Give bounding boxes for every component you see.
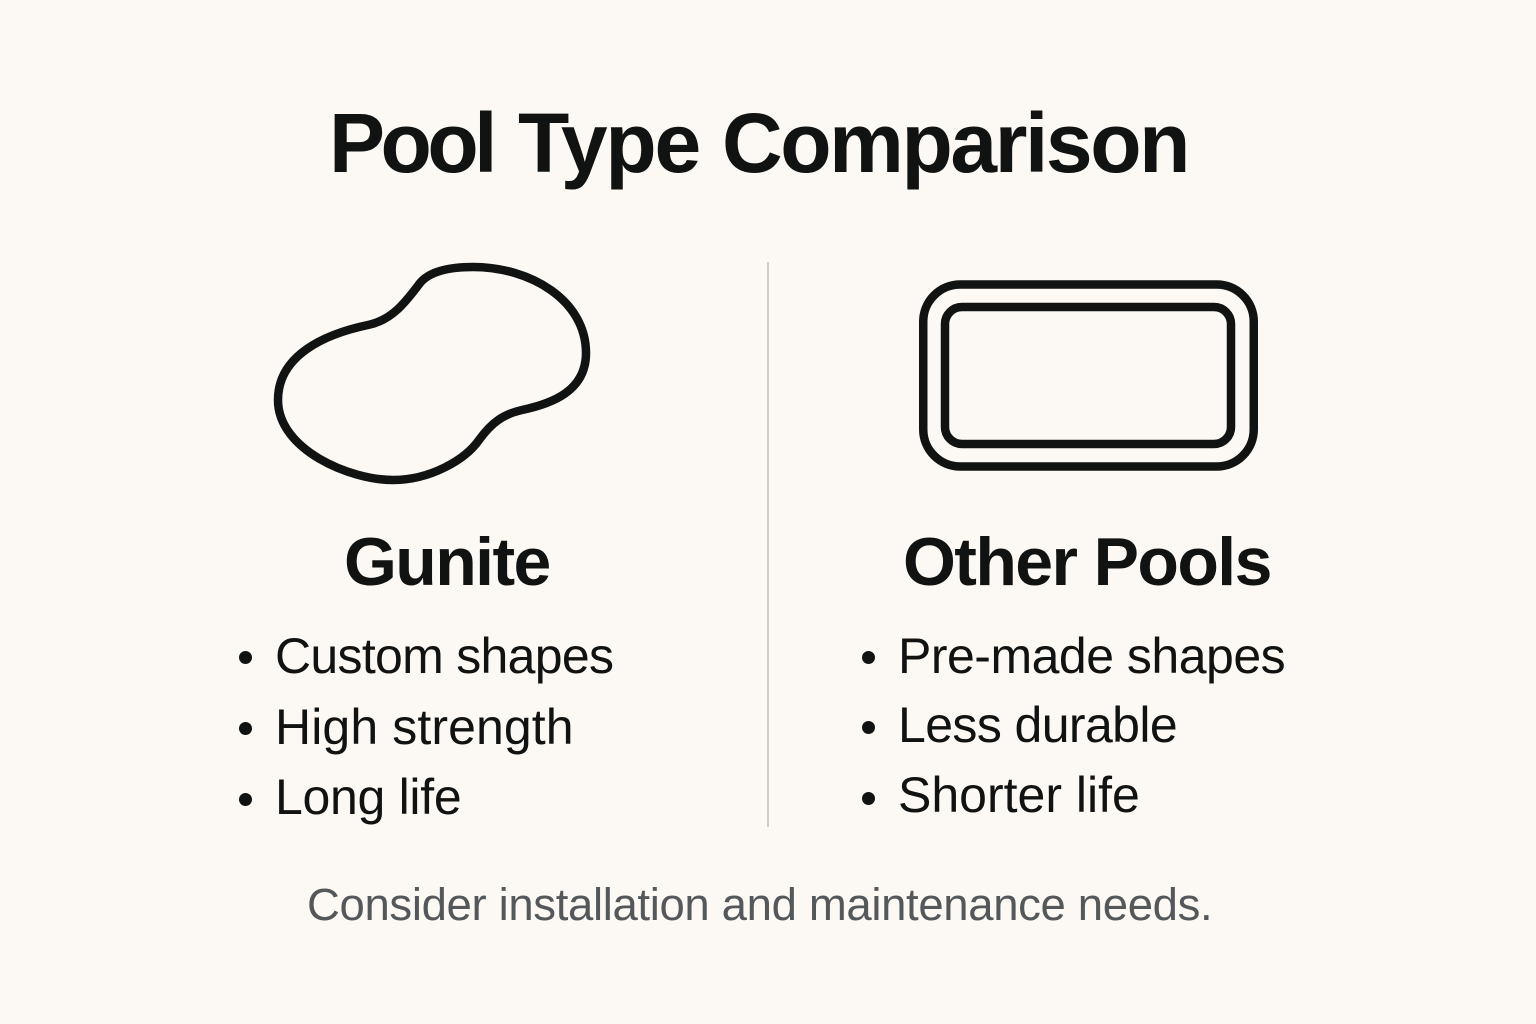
heading: gunite: Gunite (344, 524, 550, 600)
title: Comparison (722, 96, 1188, 190)
icon: other pools rectangle (919, 280, 1258, 471)
bullet list: other pools: Pre-made shapes (898, 628, 1285, 684)
footer note: Consider installation and maintenance needs. (307, 878, 1212, 930)
bullet list: other pools: Less durable (898, 697, 1177, 753)
title: Pool (329, 96, 493, 190)
panel: other pools (862, 524, 1285, 823)
bullet list: other pools: Shorter life (898, 767, 1140, 823)
heading: other pools: Other Pools (903, 524, 1271, 600)
bullet list: other pools (862, 628, 1285, 823)
title (329, 96, 1188, 190)
icon: gunite freeform pool (274, 262, 590, 484)
panel: gunite (239, 524, 613, 825)
bullet list: gunite: High strength (275, 699, 574, 755)
bullet list: gunite: Custom shapes (275, 628, 613, 684)
title: Type (518, 96, 699, 190)
bullet list: gunite (239, 628, 613, 825)
bullet list: gunite: Long life (275, 769, 461, 825)
divider (767, 262, 769, 827)
